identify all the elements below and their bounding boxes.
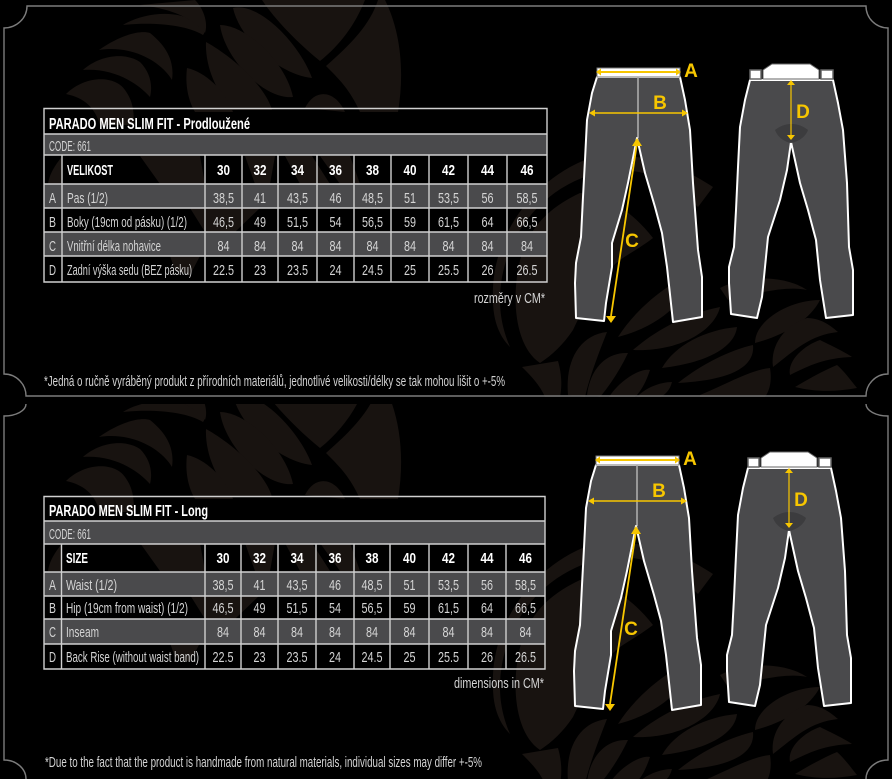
footnote: English: *Due to the fact that the product is handmade from natural materials, individual sizes may differ +-5%	[45, 754, 482, 771]
row A: waist	[49, 190, 538, 207]
row D: back rise: 26.5	[515, 649, 536, 666]
header row: 40	[404, 162, 416, 179]
row B: hips: 59	[404, 214, 416, 231]
header row: 44	[481, 162, 495, 179]
row D: back rise: 24.5	[362, 649, 382, 666]
row C: inseam: 84	[520, 624, 532, 641]
row A: waist: Pas (1/2)	[67, 190, 108, 207]
row D: back rise: 26	[482, 262, 494, 279]
row D: back rise: 23.5	[286, 649, 308, 666]
label B: B	[653, 93, 667, 114]
row C: inseam: 84	[442, 238, 454, 255]
row C: inseam: 84	[404, 624, 416, 641]
row C: inseam: Inseam	[66, 624, 99, 641]
table title: PARADO MEN SLIM FIT - Long	[49, 503, 208, 520]
row A: waist: 53,5	[438, 577, 459, 594]
row A: waist: A	[49, 190, 56, 207]
row A: waist: 41	[254, 577, 266, 594]
row A: waist	[49, 577, 536, 594]
row A: waist: 48,5	[362, 577, 382, 594]
arrow C	[606, 138, 642, 323]
row B: hips: 54	[330, 214, 342, 231]
header row: 32	[254, 162, 266, 179]
row B: hip: 49	[254, 600, 266, 617]
header row	[66, 550, 532, 567]
row B: hip: Hip (19cm from waist) (1/2)	[66, 600, 188, 617]
row A: waist: 58,5	[515, 577, 536, 594]
header row: 34	[290, 550, 304, 567]
header row: 42	[442, 550, 455, 567]
row A: waist: 48,5	[362, 190, 383, 207]
header row: 36	[329, 162, 342, 179]
row A: waist: 58,5	[516, 190, 538, 207]
row D: back rise: 23	[254, 262, 266, 279]
row A: waist: Waist (1/2)	[66, 577, 117, 594]
label C: C	[625, 231, 639, 252]
header row: 46	[520, 162, 534, 179]
table: Czech size chart	[44, 108, 547, 282]
header row: 32	[253, 550, 266, 567]
row A: waist: 51	[404, 577, 416, 594]
row C: inseam: 84	[291, 624, 303, 641]
header row: 30	[217, 162, 230, 179]
row C: inseam: C	[49, 238, 56, 255]
row A: waist: 38,5	[213, 190, 234, 207]
row C: inseam: 84	[218, 238, 230, 255]
header row: SIZE	[66, 550, 88, 567]
row C: inseam: 84	[404, 238, 416, 255]
row C: inseam: 84	[442, 624, 454, 641]
arrow A	[595, 456, 680, 464]
row C: inseam: 84	[329, 624, 341, 641]
panel frame: top	[4, 6, 888, 396]
row B: hip: 46,5	[212, 600, 234, 617]
header row: 42	[442, 162, 455, 179]
row A: waist: 43,5	[286, 577, 308, 594]
arrow C	[605, 526, 641, 711]
label D: D	[796, 102, 810, 123]
row D: back rise: 22.5	[212, 649, 234, 666]
row A: waist: 53,5	[438, 190, 459, 207]
row B: hip: 59	[404, 600, 416, 617]
row A: waist: 56	[481, 577, 493, 594]
row A: waist: 46	[329, 577, 341, 594]
row C: inseam: 84	[292, 238, 304, 255]
header row: 38	[366, 550, 378, 567]
row B: hip: 64	[481, 600, 493, 617]
arrow B	[589, 110, 688, 116]
row D: back rise: Back Rise (without waist band)	[66, 649, 199, 666]
row D: back rise: Zadní výška sedu (BEZ pásku)	[67, 262, 192, 279]
row B: hip: 56,5	[362, 600, 382, 617]
label A: A	[684, 61, 698, 82]
header row: 44	[480, 550, 494, 567]
row B: hips: B	[49, 214, 56, 231]
label A: A	[683, 449, 697, 470]
row D: back rise: 23.5	[287, 262, 308, 279]
row C: inseam: 84	[481, 624, 493, 641]
row C: inseam: C	[49, 624, 56, 641]
panel frame: bottom	[4, 404, 888, 779]
row D: back rise: 24	[330, 262, 342, 279]
row D: back rise	[49, 262, 538, 279]
header row: 36	[328, 550, 342, 567]
row D: back rise: 26.5	[516, 262, 538, 279]
row B: hips: 51,5	[287, 214, 308, 231]
table: English size chart	[44, 496, 545, 669]
row D: back rise: D	[49, 649, 56, 666]
row A: waist: 41	[254, 190, 266, 207]
header row: 34	[291, 162, 305, 179]
diagram: front of trousers, top	[575, 61, 702, 323]
row B: hips: 56,5	[362, 214, 383, 231]
row D: back rise: 25	[404, 649, 416, 666]
row A: waist: 56	[482, 190, 494, 207]
row D: back rise: 25	[404, 262, 416, 279]
row D: back rise: 25.5	[438, 649, 459, 666]
diagram: back of trousers, bottom	[727, 452, 851, 706]
arrow B	[588, 498, 687, 504]
row B: hip: 66,5	[515, 600, 536, 617]
label C: C	[624, 619, 638, 640]
header row: VELIKOST	[67, 162, 113, 179]
header row: 40	[403, 550, 416, 567]
row B: hip: 54	[329, 600, 341, 617]
row B: hips: 64	[482, 214, 494, 231]
row D: back rise: D	[49, 262, 56, 279]
row C: inseam	[49, 238, 533, 255]
diagram: front of trousers, bottom	[574, 449, 701, 711]
row C: inseam: 84	[366, 238, 378, 255]
background: top panel tribal emblems	[48, 0, 857, 397]
row B: hips: 61,5	[438, 214, 459, 231]
row C: inseam	[49, 624, 532, 641]
row A: waist: 46	[330, 190, 342, 207]
row B: hips	[49, 214, 538, 231]
footnote: Czech: *Jedná o ručně vyráběný produkt z přírodních materiálů, jednotlivé velikosti/délky se tak mohou lišit o +-5%	[44, 373, 505, 390]
background: bottom panel tribal emblems	[48, 387, 857, 779]
row B: hips: 66,5	[516, 214, 538, 231]
row B: hip	[49, 600, 536, 617]
product code: CODE: 661	[49, 138, 91, 155]
row A: waist: 38,5	[212, 577, 234, 594]
arrow D	[787, 80, 795, 140]
table title: PARADO MEN SLIM FIT - Prodloužené	[49, 116, 250, 133]
row B: hip: 61,5	[438, 600, 459, 617]
diagram: back of trousers, top	[729, 64, 853, 318]
header row: 46	[519, 550, 532, 567]
arrow D	[785, 468, 793, 528]
row A: waist: A	[49, 577, 56, 594]
row C: inseam: 84	[482, 238, 494, 255]
row B: hip: B	[49, 600, 56, 617]
row D: back rise: 23	[254, 649, 266, 666]
row B: hip: 51,5	[286, 600, 308, 617]
row D: back rise: 24	[329, 649, 341, 666]
row B: hips: Boky (19cm od pásku) (1/2)	[67, 214, 187, 231]
row C: inseam: 84	[366, 624, 378, 641]
product code: CODE: 661	[49, 526, 91, 543]
row D: back rise: 25.5	[438, 262, 459, 279]
row C: inseam: 84	[254, 238, 266, 255]
arrow A	[596, 68, 681, 76]
row C: inseam: 84	[254, 624, 266, 641]
row B: hips: 46,5	[213, 214, 234, 231]
row C: inseam: 84	[217, 624, 229, 641]
header row: 30	[216, 550, 230, 567]
row C: inseam: Vnitřní délka nohavice	[67, 238, 161, 255]
header row	[67, 162, 534, 179]
units note: Czech: rozměry v CM*	[474, 290, 545, 307]
units note: English: dimensions in CM*	[454, 675, 544, 692]
row C: inseam: 84	[521, 238, 533, 255]
row A: waist: 51	[404, 190, 416, 207]
row A: waist: 43,5	[287, 190, 308, 207]
header row: 38	[366, 162, 379, 179]
row B: hips: 49	[254, 214, 266, 231]
row D: back rise	[49, 649, 536, 666]
row D: back rise: 24.5	[362, 262, 383, 279]
row D: back rise: 26	[481, 649, 493, 666]
row C: inseam: 84	[330, 238, 342, 255]
label B: B	[652, 481, 666, 502]
row D: back rise: 22.5	[213, 262, 234, 279]
label D: D	[794, 490, 808, 511]
